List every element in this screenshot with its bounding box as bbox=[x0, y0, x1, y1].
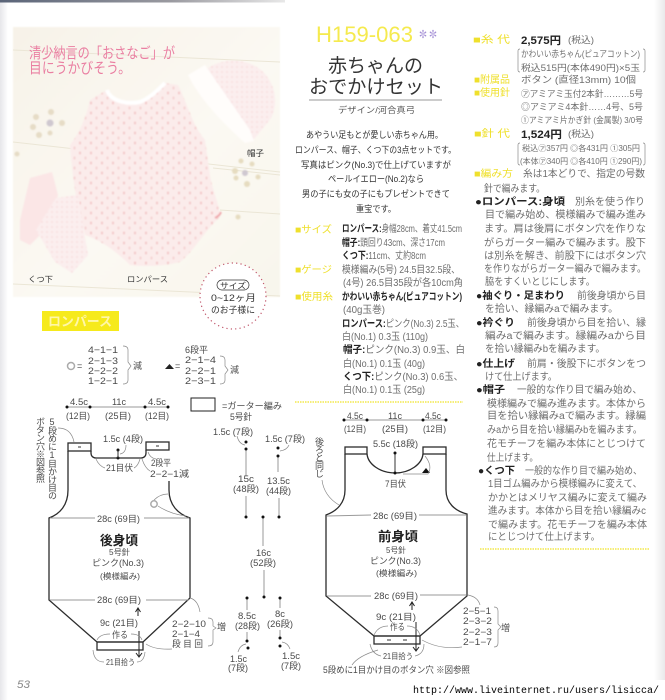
front crotch annotations bbox=[352, 602, 462, 665]
main title: 赤ちゃんの bbox=[328, 55, 423, 77]
garter stitch legend: =ガーター編み bbox=[222, 400, 282, 411]
front width top row: 11c bbox=[388, 411, 403, 421]
front width top row bbox=[342, 411, 448, 434]
front crotch annotations: 21目拾う bbox=[383, 651, 413, 661]
instructions text: 目を拾い縁編みaで編みます。縁編 bbox=[487, 409, 646, 422]
instructions text: ●くつ下 bbox=[478, 465, 515, 477]
triangle decrease table: 6段平 bbox=[185, 344, 208, 355]
instructions text: 前肩・後股下にボタンをつ bbox=[527, 357, 646, 370]
back width lines: 28c (69目) bbox=[97, 514, 140, 524]
dimension: side centre column: (52段) bbox=[250, 557, 276, 568]
spec list: ■使用糸 bbox=[295, 290, 333, 303]
instructions text: にとじつけて仕上げます。 bbox=[488, 530, 600, 543]
materials and prices: (税込) bbox=[568, 34, 594, 45]
dimension: lower right column: 1.5c bbox=[282, 651, 301, 661]
crotch increase table: 2−1−4 bbox=[172, 629, 200, 639]
armhole marker bbox=[151, 494, 186, 516]
garter stitch legend bbox=[191, 398, 282, 422]
instructions text: 糸は1本どりで、指定の号数 bbox=[523, 167, 645, 180]
instructions text: 1目ゴム編みから模様編みに変えて、 bbox=[488, 477, 642, 490]
materials and prices: ◎アミアミ4本針……4号、5号 bbox=[521, 101, 643, 112]
back piece title: 後身頃 bbox=[100, 533, 138, 548]
dimension: back left column: 15c bbox=[238, 474, 255, 484]
back width top row: 11c bbox=[112, 397, 127, 407]
intro text: 重宝です。 bbox=[356, 203, 396, 214]
back piece title: 5号針 bbox=[109, 547, 130, 557]
front increase table: 2−2−3 bbox=[463, 627, 492, 637]
triangle decrease table: 2−1−4 bbox=[185, 355, 216, 366]
spec list: ■サイズ bbox=[295, 223, 332, 236]
front width top row: 4.5c bbox=[425, 411, 441, 421]
back outline bbox=[49, 450, 190, 642]
back piece title bbox=[92, 533, 144, 581]
front width top row: (12目) bbox=[423, 424, 446, 434]
front crotch annotations: 9c (21目) bbox=[376, 612, 416, 622]
materials and prices: ㋐アミアミ玉付2本針………5号 bbox=[521, 88, 643, 99]
front width top row: 4.5c bbox=[347, 411, 363, 421]
instructions text: ●ロンパース:身頃 bbox=[475, 195, 565, 208]
vertical button note bbox=[35, 417, 74, 500]
spec list: 模様編み(5号) 24.5目32.5段、 bbox=[342, 263, 460, 276]
instructions text: を作りながらガーター編みで編みます。 bbox=[484, 262, 646, 275]
dimension: side centre column bbox=[250, 516, 276, 598]
materials and prices: ■針 代 bbox=[474, 127, 510, 140]
circle decrease table: 1−2−1 bbox=[88, 376, 118, 387]
front width lines: 28c (69目) bbox=[374, 591, 418, 601]
materials and prices: (税込) bbox=[568, 128, 594, 139]
back width top row bbox=[66, 397, 170, 421]
intro text: あやうい足もとが愛しい赤ちゃん用。 bbox=[306, 129, 443, 140]
front increase table: 2−3−2 bbox=[463, 616, 492, 626]
dimension: back left column: 1.5c (7段) bbox=[213, 426, 253, 437]
size badge: 0~12ヶ月 bbox=[211, 293, 256, 303]
circle decrease table: 4−1−1 bbox=[88, 345, 118, 356]
instructions text: 進みます。本体から目を拾い縁編みc bbox=[488, 504, 646, 517]
front outline bbox=[326, 454, 467, 636]
photo: hat bbox=[188, 61, 275, 143]
instructions text: 一般的な作り目で編み始め、 bbox=[525, 464, 642, 477]
dimension: lower right column: (7段) bbox=[281, 660, 301, 671]
materials and prices bbox=[473, 33, 645, 166]
materials and prices: 1,524円 bbox=[521, 128, 562, 141]
dimension: front right column: 1.5c (7段) bbox=[265, 433, 305, 444]
instructions text: 目で編み始め、模様編みで編み進み bbox=[485, 208, 646, 221]
designer: デザイン/河合真弓 bbox=[338, 105, 415, 115]
dimension: lower right column bbox=[267, 596, 301, 671]
dimension: lower left column: 8.5c bbox=[238, 611, 257, 621]
materials and prices: ■糸 代 bbox=[473, 33, 510, 46]
crotch increase table: 2−2−10 bbox=[172, 619, 206, 629]
crotch annotations: 9c (21目) bbox=[100, 618, 138, 628]
spec list: 帽子:頭回り43cm、深さ17cm bbox=[342, 236, 445, 249]
neck annotations: 21目伏 bbox=[106, 462, 133, 473]
dimension: lower left column: (7段) bbox=[228, 662, 248, 673]
main title bbox=[309, 55, 443, 98]
difficulty flowers: ✽✽ bbox=[418, 29, 438, 41]
materials and prices: ■使用針 bbox=[474, 86, 510, 99]
caption: socks: くつ下 bbox=[28, 275, 53, 284]
front width top row: (12目) bbox=[344, 424, 366, 434]
back piece title: (模様編み) bbox=[100, 571, 140, 581]
vertical button note: ボタン穴※図参照 bbox=[35, 417, 45, 484]
instructions text: かかとはメリヤス編みに変えて編み bbox=[488, 491, 647, 504]
front piece title: (模様編み) bbox=[376, 568, 417, 578]
front width top row: (25目) bbox=[382, 424, 408, 434]
photo: decorative beads right bbox=[232, 158, 260, 220]
instructions text: ●仕上げ bbox=[476, 357, 515, 370]
dimension: lower right column: (26段) bbox=[267, 618, 293, 629]
dimension: lower left column bbox=[228, 596, 260, 673]
main title: おでかけセット bbox=[309, 77, 443, 98]
panel: product photo bbox=[13, 27, 280, 297]
instructions text: 模様編みで編み進みます。本体から bbox=[487, 397, 646, 410]
size badge bbox=[200, 263, 266, 329]
instructions text: ます。肩は後肩にボタン穴を作りな bbox=[484, 222, 646, 235]
instructions text: 花モチーフを編み本体にとじつけて bbox=[487, 437, 646, 450]
triangle decrease table: 2−2−1 bbox=[185, 366, 216, 377]
instructions text: 別糸を使う作り bbox=[575, 195, 645, 208]
shoulder and crotch bands bbox=[68, 442, 169, 650]
dimension: front right column: (44段) bbox=[266, 485, 291, 496]
spec list: ■ゲージ bbox=[295, 264, 332, 276]
spec list: かわいい赤ちゃん(ピュアコットン) bbox=[342, 291, 462, 303]
decrease tables bbox=[68, 344, 282, 422]
crotch annotations bbox=[93, 608, 172, 667]
materials and prices: 税込515円(本体490円)×5玉 bbox=[521, 62, 640, 73]
neck annotations: 2段平 bbox=[151, 457, 171, 468]
crotch increase table bbox=[172, 598, 226, 649]
instructions text: 針で編みます。 bbox=[484, 182, 545, 195]
triangle decrease table: = bbox=[175, 361, 180, 371]
triangle decrease table bbox=[165, 344, 239, 387]
instructions text: けて仕上げます。 bbox=[485, 370, 557, 383]
instructions text: 前後身頃から目 bbox=[577, 289, 646, 302]
instructions text: ■編み方 bbox=[474, 167, 513, 180]
materials and prices: ①アミアミ片かぎ針 (金属製) 3/0号 bbox=[521, 115, 643, 125]
materials and prices: 税込㋐357円 ◎各431円 ①305円 bbox=[522, 143, 640, 153]
intro text bbox=[295, 129, 456, 214]
front neck annotations: 7目伏 bbox=[385, 478, 406, 489]
spec list: (40g玉巻) bbox=[343, 304, 385, 316]
dimension: lower left column: (28段) bbox=[235, 620, 260, 631]
instructions text: ●袖ぐり・足まわり bbox=[476, 289, 565, 302]
instructions text: 前後身頃から目を拾い、縁 bbox=[527, 316, 646, 329]
back width top row: (12目) bbox=[145, 411, 169, 421]
front neck annotations: 5.5c (18段) bbox=[373, 438, 418, 449]
size badge: サイズ bbox=[220, 280, 246, 290]
watermark url bbox=[410, 680, 665, 697]
diagram: back body bbox=[35, 397, 226, 667]
spec list: くつ下:ピンク(No.3) 0.6玉、 bbox=[343, 371, 463, 383]
instructions text: ●帽子 bbox=[476, 383, 505, 396]
triangle decrease table: 減 bbox=[230, 364, 239, 375]
neck annotations: 1.5c (4段) bbox=[103, 433, 143, 444]
intro text: 男の子にも女の子にもプレゼントできて bbox=[302, 188, 450, 199]
diagram: strap and side measurements bbox=[213, 426, 305, 673]
spec list: (4号) 26.5目35段が各10cm角 bbox=[343, 276, 463, 289]
back width lines bbox=[50, 514, 189, 605]
vertical button note: 5段めに1目かけ目の bbox=[47, 417, 57, 500]
spec list bbox=[295, 222, 465, 396]
front width lines: 28c (69目) bbox=[373, 511, 417, 521]
photo: socks bbox=[20, 172, 88, 273]
spec list: くつ下:11cm、丈約8cm bbox=[342, 249, 426, 262]
instructions text: ●衿ぐり bbox=[476, 316, 515, 329]
instructions text: 仕上げます。 bbox=[487, 451, 538, 464]
garter stitch legend: 5号針 bbox=[230, 411, 252, 422]
photo: romper bbox=[70, 83, 221, 266]
triangle decrease table: 2−3−1 bbox=[185, 376, 216, 387]
dimension: lower right column: 8c bbox=[275, 609, 286, 619]
photo headline: 目にうかびそう。 bbox=[29, 60, 131, 77]
materials and prices: かわいい赤ちゃん(ピュアコットン) bbox=[521, 49, 640, 59]
instructions text: 編みaで編みます。縁編みaから目 bbox=[485, 329, 646, 342]
circle decrease table: = bbox=[77, 361, 82, 371]
circle decrease table: 2−2−2 bbox=[88, 366, 118, 377]
front bands bbox=[345, 447, 446, 644]
dimension: front right column bbox=[265, 433, 305, 518]
neck annotations bbox=[96, 433, 189, 479]
front increase table bbox=[463, 595, 510, 647]
spec list: ロンパース:ピンク(No.3) 2.5玉、 bbox=[342, 318, 464, 330]
instructions text: を拾い、縁編みaで編みます。 bbox=[485, 302, 618, 315]
front neck annotations bbox=[373, 438, 430, 489]
same-as-back note: 後ろと同じ bbox=[314, 436, 324, 478]
back width lines: 28c (69目) bbox=[97, 595, 141, 605]
photo headline bbox=[29, 45, 175, 77]
dimension: front right column: 13.5c bbox=[267, 476, 291, 486]
size badge: のお子様に bbox=[211, 304, 255, 315]
instructions text: は別糸を解き、前股下にはボタン穴 bbox=[484, 249, 646, 262]
intro text: ロンパース、帽子、くつ下の3点セットです。 bbox=[295, 144, 456, 155]
back piece title: ピンク(No.3) bbox=[92, 558, 144, 568]
intro text: 写真はピンク(No.3)で仕上げていますが bbox=[301, 159, 451, 170]
photo: decorative beads left bbox=[14, 109, 65, 156]
materials and prices: ■附属品 bbox=[474, 73, 510, 86]
front piece title bbox=[370, 529, 421, 578]
crotch annotations: 作る bbox=[112, 629, 128, 640]
materials and prices: ボタン (直径13mm) 10個 bbox=[521, 74, 636, 86]
circle decrease table: 2−1−3 bbox=[88, 356, 118, 367]
front piece title: 前身頃 bbox=[378, 529, 418, 544]
materials and prices: 2,575円 bbox=[521, 34, 561, 47]
crotch annotations: 21目拾う bbox=[106, 657, 135, 667]
crotch increase table: 増 bbox=[217, 621, 226, 632]
photo headline: 清少納言の「おさなご」が bbox=[29, 45, 175, 62]
front crotch annotations: 作る bbox=[390, 621, 405, 632]
title block bbox=[309, 22, 443, 115]
front button note: 5段めに1目かけ目のボタン穴 ※図参照 bbox=[323, 664, 470, 675]
caption: romper: ロンパース bbox=[127, 275, 168, 284]
instructions text: 一般的な作り目で編み始め、 bbox=[517, 383, 642, 396]
heading: romper tag: ロンパース bbox=[48, 314, 112, 329]
circle decrease table bbox=[68, 345, 142, 387]
back width top row: 4.5c bbox=[70, 397, 89, 407]
front increase table: 2−5−1 bbox=[463, 606, 491, 616]
back width top row: 4.5c bbox=[148, 397, 167, 407]
front width lines bbox=[327, 511, 466, 601]
dimension: back left column bbox=[213, 426, 259, 518]
same-as-back note bbox=[314, 436, 339, 505]
watermark url: http://www.liveinternet.ru/users/lisicca/ bbox=[413, 685, 659, 697]
dimension: lower left column: 1.5c bbox=[230, 654, 247, 664]
pattern number: H159-063 bbox=[316, 22, 413, 47]
back width top row: (25目) bbox=[105, 411, 131, 421]
instructions text bbox=[474, 167, 647, 543]
instructions text: で編みます。花モチーフを編み本体 bbox=[488, 518, 647, 531]
instructions text: を拾い縁編みbを編みます。 bbox=[485, 342, 605, 355]
spec list: 白(No.1) 0.3玉 (110g) bbox=[342, 330, 428, 343]
front increase table: 2−1−7 bbox=[463, 637, 492, 647]
back width top row: (12目) bbox=[66, 411, 90, 421]
page number: 53 bbox=[17, 679, 31, 691]
instructions text: みaから目を拾い縁編みbを編みます。 bbox=[487, 423, 642, 436]
circle decrease table: 減 bbox=[133, 360, 142, 371]
heading: romper tag bbox=[42, 311, 119, 331]
materials and prices: (本体㋐340円 ◎各410円 ①290円) bbox=[520, 156, 642, 166]
caption: hat: 帽子 bbox=[247, 148, 264, 158]
front piece title: ピンク(No.3) bbox=[370, 556, 421, 566]
front piece title: 5号針 bbox=[386, 545, 406, 555]
instructions text: がらガーター編みで編みます。股下 bbox=[484, 236, 646, 249]
diagram: front body bbox=[314, 411, 510, 675]
crotch increase table: 段 目 回 bbox=[172, 638, 203, 649]
spec list: 白(No.1) 0.1玉 (25g) bbox=[343, 383, 425, 396]
dimension: back left column: (48段) bbox=[233, 483, 259, 494]
neck annotations: 2−2−1減 bbox=[150, 468, 189, 479]
spec list: ロンパース:身幅28cm、着丈41.5cm bbox=[342, 222, 462, 235]
instructions text: 脇をすくいとじにします。 bbox=[485, 276, 595, 288]
dimension: side centre column: 16c bbox=[256, 548, 272, 558]
front increase table: 増 bbox=[501, 622, 510, 633]
spec list: 白(No.1) 0.1玉 (40g) bbox=[343, 357, 425, 370]
intro text: ペールイエロー(No.2)なら bbox=[328, 174, 424, 184]
spec list: 帽子:ピンク(No.3) 0.9玉、白 bbox=[343, 343, 465, 356]
